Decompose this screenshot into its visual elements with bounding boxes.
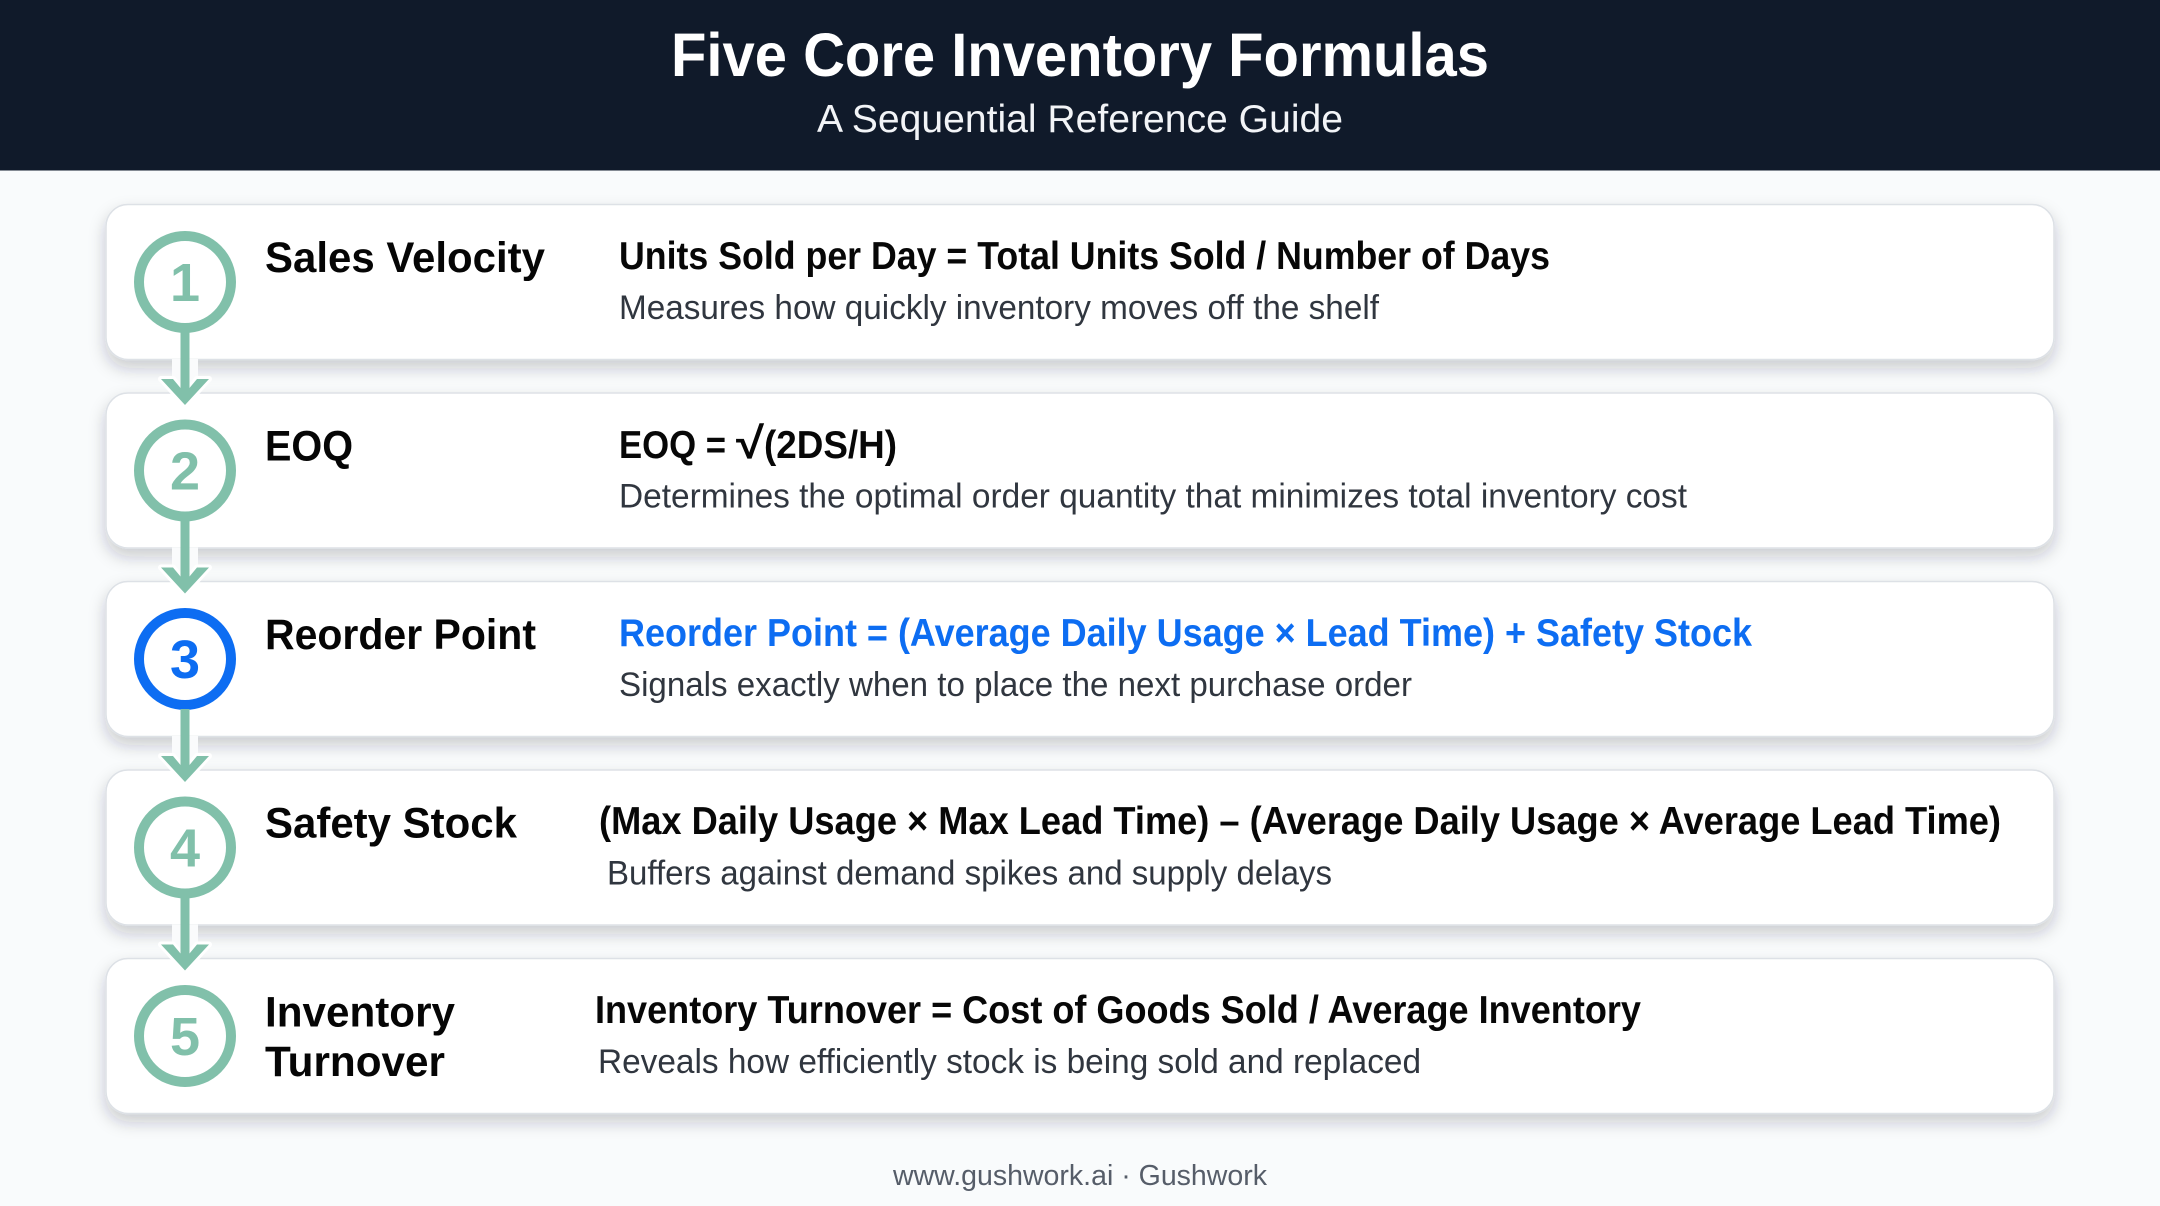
- step name: Reorder Point: [265, 611, 536, 659]
- formula: [619, 419, 897, 468]
- description: Buffers against demand spikes and supply delays: [607, 854, 1332, 892]
- arrow: step 4 to 5: [161, 898, 209, 970]
- description: Signals exactly when to place the next purchase order: [619, 666, 1412, 704]
- step number 4: [139, 802, 231, 894]
- footer: www.gushwork.ai · Gushwork: [892, 1160, 1267, 1192]
- step name: EOQ: [265, 422, 353, 470]
- formula: (2DS/H): [764, 424, 897, 467]
- panel: step 5 inventory turnover: [106, 958, 2054, 1114]
- step number 2: 2: [170, 442, 200, 502]
- step name: Sales Velocity: [265, 234, 545, 282]
- panel: step 4 safety stock: [106, 770, 2054, 925]
- formula: Inventory Turnover = Cost of Goods Sold / Average Inventory: [595, 989, 1641, 1032]
- description: Measures how quickly inventory moves off the shelf: [619, 289, 1379, 327]
- formula: √: [736, 419, 765, 468]
- header banner: [0, 0, 2160, 170]
- description: Determines the optimal order quantity that minimizes total inventory cost: [619, 478, 1687, 516]
- description: Reveals how efficiently stock is being sold and replaced: [598, 1043, 1421, 1081]
- arrow: step 1 to 2: [161, 332, 209, 405]
- step number 4: 4: [170, 818, 200, 878]
- step number 3: 3: [170, 630, 200, 690]
- formula: Units Sold per Day = Total Units Sold / Number of Days: [619, 235, 1550, 278]
- step number 2: [139, 424, 231, 516]
- formula: EOQ =: [619, 424, 726, 467]
- step number 1: 1: [170, 253, 200, 313]
- step name: Turnover: [265, 1038, 445, 1086]
- formula: (Max Daily Usage × Max Lead Time) – (Average Daily Usage × Average Lead Time): [599, 800, 2001, 843]
- step number 1: [139, 236, 231, 328]
- step name: Safety Stock: [265, 800, 517, 848]
- step number 5: 5: [170, 1007, 200, 1067]
- panel: step 1 sales velocity: [106, 204, 2054, 360]
- step name: [265, 988, 455, 1086]
- subtitle: A Sequential Reference Guide: [817, 98, 1343, 141]
- panel: step 2 EOQ: [106, 393, 2054, 548]
- step name: Inventory: [265, 988, 455, 1036]
- step number 3: [139, 613, 231, 705]
- arrow: step 2 to 3: [161, 520, 209, 594]
- panel: step 3 reorder point: [106, 582, 2054, 736]
- formula: Reorder Point = (Average Daily Usage × Lead Time) + Safety Stock: [619, 612, 1752, 655]
- step number 5: [139, 990, 231, 1082]
- arrow: step 3 to 4: [161, 709, 209, 782]
- title: Five Core Inventory Formulas: [671, 21, 1489, 89]
